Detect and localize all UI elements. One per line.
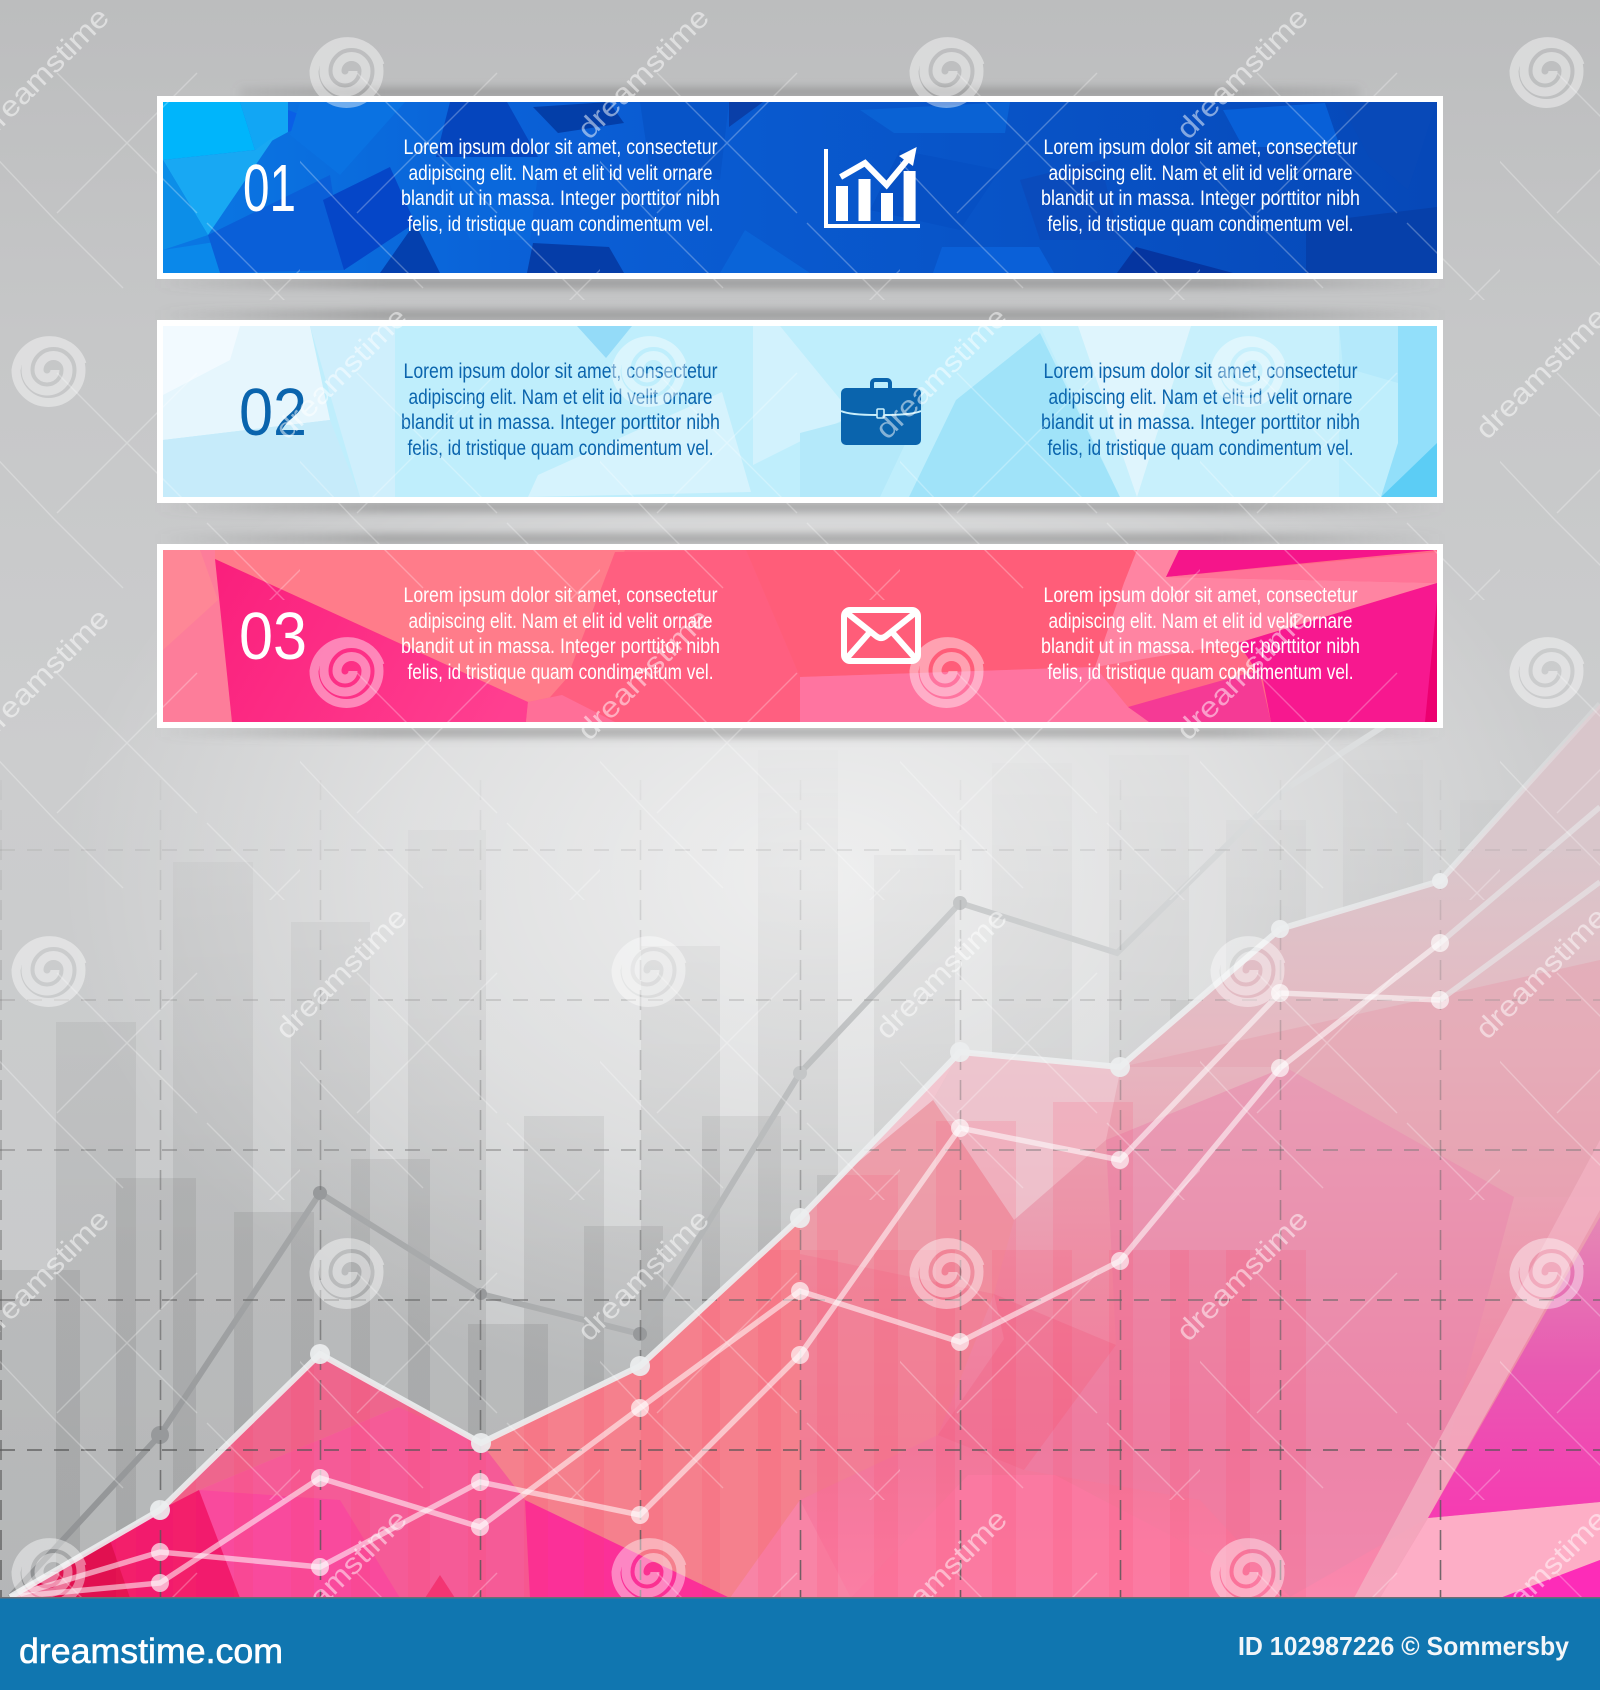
footer bar: [0, 1597, 1600, 1690]
text block right: felis, id tristique quam condimentum vel.: [1048, 661, 1354, 684]
text block left: Lorem ipsum dolor sit amet, consectetur: [404, 360, 718, 383]
text block left: adipiscing elit. Nam et elit id velit ornare: [408, 162, 712, 185]
watermark overlay: dreamstime: [870, 902, 1014, 1046]
panel 03: pink banner: [157, 544, 1443, 728]
text block left: felis, id tristique quam condimentum vel.: [408, 213, 714, 236]
text block right: [1041, 360, 1360, 460]
text block right: [1041, 584, 1360, 684]
text block right: blandit ut in massa. Integer porttitor nibh: [1041, 635, 1360, 658]
text block right: Lorem ipsum dolor sit amet, consectetur: [1044, 584, 1358, 607]
top line series: [10, 704, 1600, 1597]
banner shadows: [157, 88, 1443, 737]
text block left: blandit ut in massa. Integer porttitor nibh: [401, 635, 720, 658]
panel 01: blue banner: [157, 96, 1443, 279]
watermark overlay: dreamstime: [1171, 603, 1315, 747]
watermark overlay: dreamstime: [270, 1504, 414, 1648]
text block right: blandit ut in massa. Integer porttitor nibh: [1041, 187, 1360, 210]
text block left: [401, 584, 720, 684]
watermark overlay: dreamstime: [270, 302, 414, 446]
watermark overlay: dreamstime: [572, 1204, 716, 1348]
text block right: [1041, 136, 1360, 236]
text block left: felis, id tristique quam condimentum vel.: [408, 661, 714, 684]
text block left: adipiscing elit. Nam et elit id velit ornare: [408, 386, 712, 409]
watermark overlay: dreamstime: [1171, 2, 1315, 146]
watermark overlay: dreamstime: [870, 1504, 1014, 1648]
text block left: [401, 360, 720, 460]
low-poly pink area chart: [0, 700, 1600, 1598]
text block left: felis, id tristique quam condimentum vel.: [408, 437, 714, 460]
watermark overlay: dreamstime: [1470, 302, 1600, 446]
watermark overlay: dreamstime: [1470, 902, 1600, 1046]
text block left: adipiscing elit. Nam et elit id velit ornare: [408, 610, 712, 633]
watermark overlay: dreamstime: [1171, 1204, 1315, 1348]
text block left: Lorem ipsum dolor sit amet, consectetur: [404, 584, 718, 607]
number 03: 03: [239, 599, 307, 674]
text block right: Lorem ipsum dolor sit amet, consectetur: [1044, 136, 1358, 159]
watermark overlay: dreamstime: [1470, 1504, 1600, 1648]
watermark overlay: dreamstime: [270, 902, 414, 1046]
text block right: adipiscing elit. Nam et elit id velit ornare: [1048, 162, 1352, 185]
text block right: Lorem ipsum dolor sit amet, consectetur: [1044, 360, 1358, 383]
icon: briefcase: [841, 380, 921, 445]
dashed grid: [0, 780, 1600, 1598]
text block left: [401, 136, 720, 236]
text block right: blandit ut in massa. Integer porttitor nibh: [1041, 411, 1360, 434]
watermark overlay: dreamstime: [870, 302, 1014, 446]
text block right: felis, id tristique quam condimentum vel.: [1048, 437, 1354, 460]
icon: envelope: [844, 610, 918, 661]
icon: rising bar chart: [824, 147, 920, 228]
number 01: 01: [243, 151, 296, 226]
number 02: 02: [239, 375, 307, 450]
panel 02: light blue banner: [157, 320, 1443, 503]
grey background line: [10, 690, 1440, 1597]
watermark overlay: dreamstime: [572, 2, 716, 146]
text block right: adipiscing elit. Nam et elit id velit ornare: [1048, 386, 1352, 409]
line series 2 and 3: [10, 807, 1600, 1597]
watermark overlay: dreamstime: [572, 603, 716, 747]
text block right: adipiscing elit. Nam et elit id velit ornare: [1048, 610, 1352, 633]
footer credit: ID 102987226 © Sommersby: [1238, 1631, 1570, 1661]
text block left: blandit ut in massa. Integer porttitor nibh: [401, 187, 720, 210]
text block left: blandit ut in massa. Integer porttitor nibh: [401, 411, 720, 434]
text block left: Lorem ipsum dolor sit amet, consectetur: [404, 136, 718, 159]
text block right: felis, id tristique quam condimentum vel.: [1048, 213, 1354, 236]
footer logo text: dreamstime.com: [19, 1632, 283, 1671]
bar chart: grey columns: [0, 750, 1600, 1598]
